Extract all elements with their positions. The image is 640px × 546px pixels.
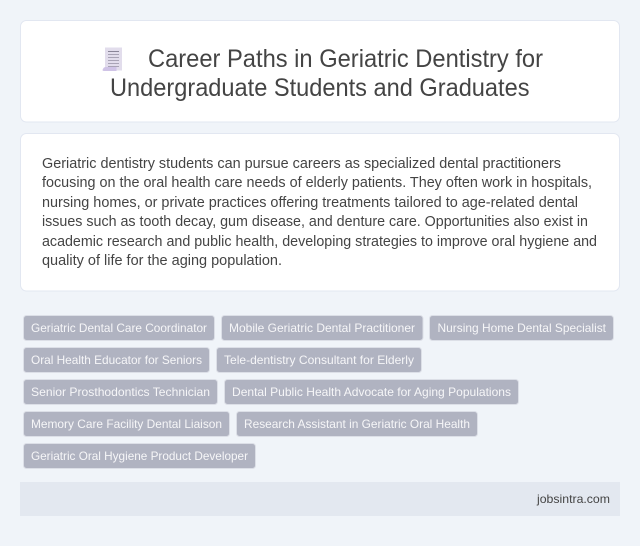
tag list: career paths: [24, 316, 614, 468]
text block: description: nursing homes, or private practices offering treatments tailored to age-related dental: [42, 195, 578, 211]
tag: [224, 380, 518, 404]
footer source text: jobsintra.com: [536, 492, 610, 506]
tag: [24, 412, 230, 436]
icon: document scroll: [102, 48, 122, 71]
tag: Dental Public Health Advocate for Aging Populations: [232, 385, 511, 399]
text block: description: Geriatric dentistry students can pursue careers as specialized dental practitioners: [42, 156, 561, 172]
text block: description: quality of life for the aging population.: [42, 253, 282, 269]
text block: description: focusing on the oral health care needs of elderly patients. They often work in hospitals,: [42, 175, 592, 191]
tag: [24, 348, 210, 372]
tag: [24, 444, 256, 468]
tag: Senior Prosthodontics Technician: [31, 385, 210, 399]
panel: description: [20, 134, 620, 291]
tag: [24, 380, 218, 404]
tag: Research Assistant in Geriatric Oral Health: [244, 417, 470, 431]
tag: [236, 412, 478, 436]
title: Undergraduate Students and Graduates: [110, 74, 530, 102]
panel: header: [20, 20, 620, 122]
tag: Mobile Geriatric Dental Practitioner: [229, 321, 415, 335]
tag: Nursing Home Dental Specialist: [438, 321, 607, 335]
tag: Geriatric Oral Hygiene Product Developer: [31, 449, 248, 463]
title: [110, 45, 543, 102]
tag: [430, 316, 614, 340]
tag: Oral Health Educator for Seniors: [31, 353, 202, 367]
tag: Tele-dentistry Consultant for Elderly: [224, 353, 414, 367]
tag: [24, 316, 214, 340]
text block: description: [42, 156, 597, 269]
text block: description: academic research and public health, developing strategies to improve oral hygiene and: [42, 234, 597, 250]
footer: [20, 482, 620, 516]
text block: description: issues such as tooth decay, gum disease, and denture care. Opportunities also exist in: [42, 214, 588, 230]
tag: [222, 316, 423, 340]
tag: [216, 348, 422, 372]
tag: Memory Care Facility Dental Liaison: [31, 417, 222, 431]
title: Career Paths in Geriatric Dentistry for: [148, 45, 543, 73]
tag: Geriatric Dental Care Coordinator: [31, 321, 207, 335]
